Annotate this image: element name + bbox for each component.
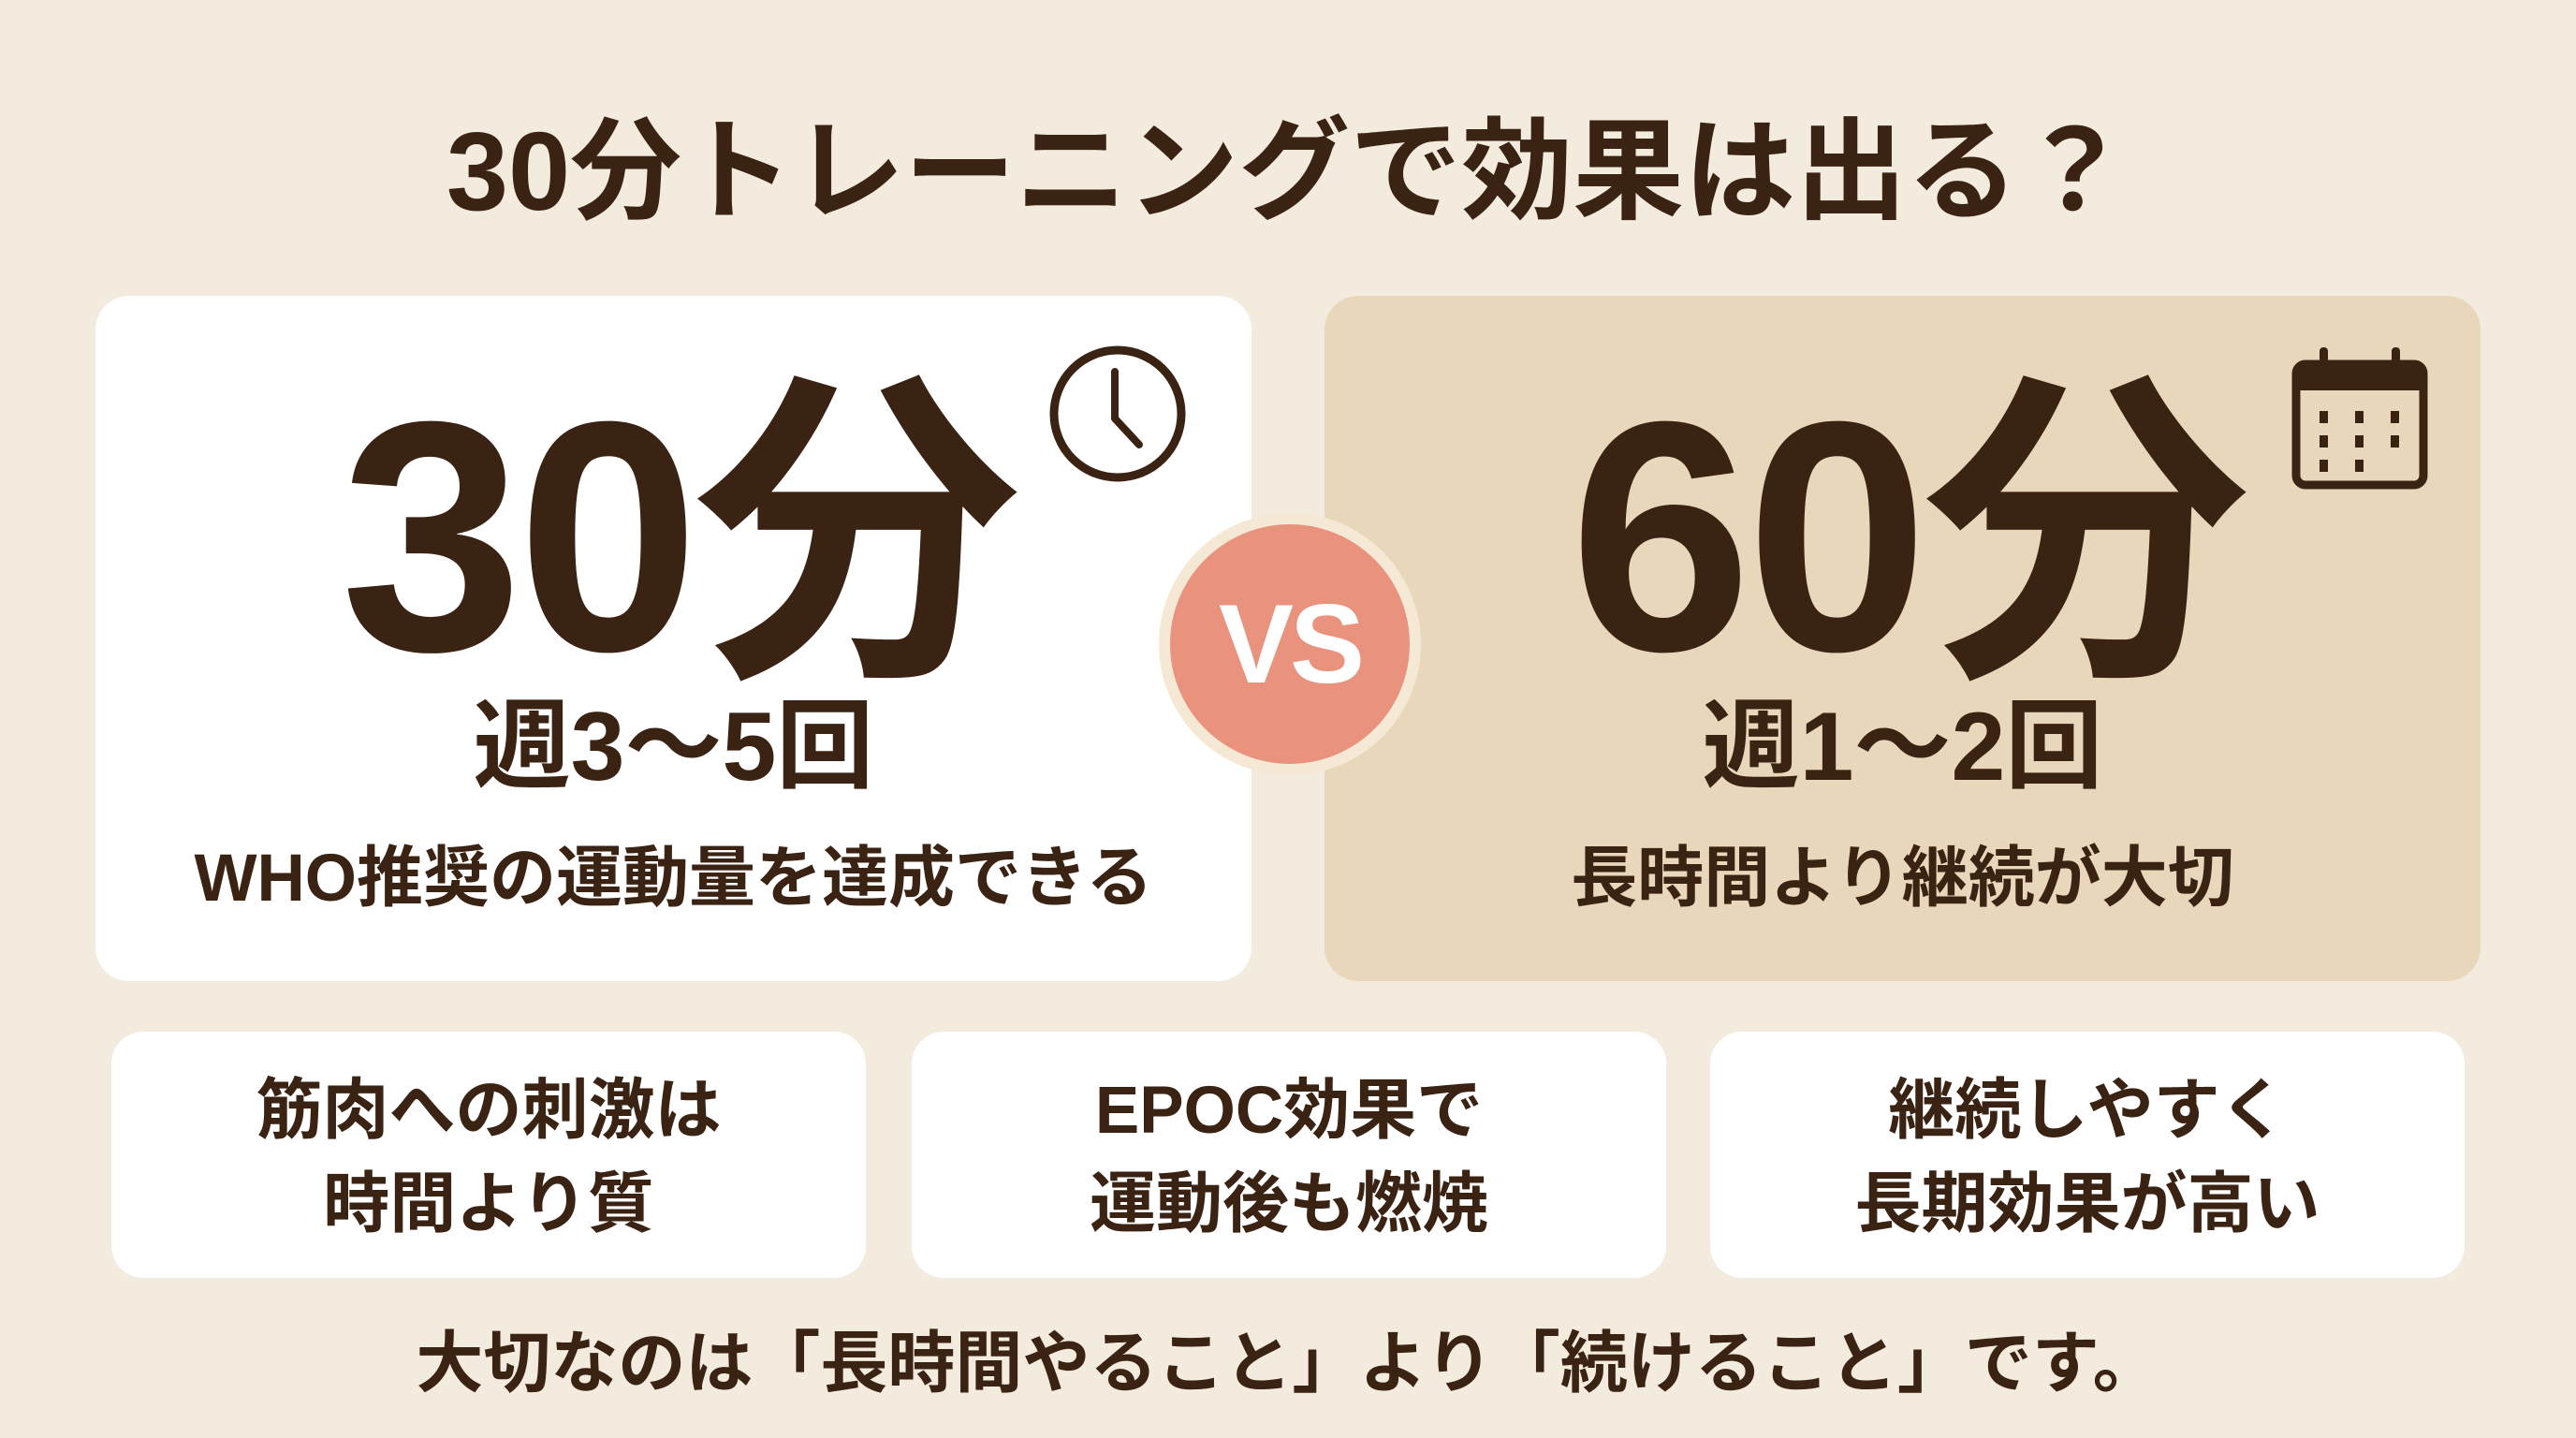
title: 30分トレーニングで効果は出る？ — [446, 110, 2130, 234]
frequency 週3〜5回: 週3〜5回 — [474, 693, 873, 801]
VS badge — [1159, 513, 1421, 775]
card: EPOC — [912, 1032, 1666, 1278]
description: WHO推奨の運動量を達成できる — [194, 842, 1153, 916]
card: continuity: 継続しやすく — [1888, 1073, 2287, 1148]
panel: 30 minutes — [95, 296, 1251, 981]
card: continuity: 長期効果が高い — [1854, 1167, 2320, 1241]
card: muscle stimulus — [111, 1032, 866, 1278]
description: 長時間より継続が大切 — [1571, 842, 2234, 916]
footer message: 大切なのは「長時間やること」より「続けること」です。 — [416, 1327, 2160, 1401]
VS badge: VS — [1219, 581, 1361, 707]
card: EPOC: 運動後も燃焼 — [1090, 1167, 1488, 1241]
big number 30分: 30分 — [341, 354, 1016, 720]
panel: 60 minutes — [1325, 296, 2481, 981]
card: muscle stimulus: 筋肉への刺激は — [256, 1073, 721, 1148]
icon: clock — [1050, 346, 1185, 481]
frequency 週1〜2回: 週1〜2回 — [1703, 693, 2102, 801]
card: continuity — [1710, 1032, 2465, 1278]
icon: calendar — [2291, 347, 2428, 489]
big number 60分: 60分 — [1570, 354, 2245, 720]
card: muscle stimulus: 時間より質 — [323, 1167, 654, 1241]
card: EPOC: EPOC効果で — [1095, 1073, 1483, 1148]
